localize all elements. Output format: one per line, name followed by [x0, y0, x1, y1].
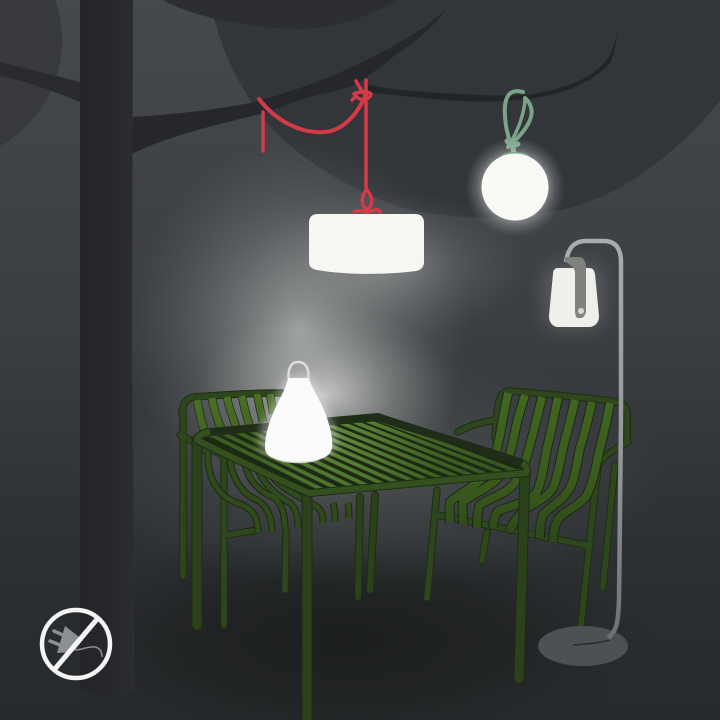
- left foliage: [0, 0, 62, 162]
- globe body: [482, 154, 548, 220]
- lamp: balad on stand: [546, 257, 602, 328]
- chair back slats: [197, 394, 273, 432]
- large foliage: [210, 0, 720, 217]
- red cord: [259, 80, 380, 212]
- table: [197, 417, 527, 720]
- ambient glow behind lamps: [70, 140, 670, 590]
- left branch: [0, 62, 80, 102]
- bell handle: [288, 362, 309, 378]
- globe cap: [501, 152, 529, 160]
- table top dark base: [197, 417, 527, 493]
- chair legs and frame: [427, 391, 628, 625]
- lamp: bell on table: [258, 362, 338, 463]
- floor lamp pole: [566, 241, 621, 638]
- chair seat slats: [208, 453, 349, 533]
- plug prongs: [50, 631, 65, 645]
- second branch: [368, 33, 617, 102]
- table top slats: [209, 419, 516, 490]
- drum body: [309, 214, 424, 274]
- table legs: [197, 440, 525, 720]
- chair slats: [450, 393, 610, 542]
- green strap: [505, 91, 532, 154]
- table frame: [197, 417, 527, 493]
- tree trunk: [80, 0, 135, 695]
- lamp strap: [565, 257, 586, 318]
- bell base: [273, 458, 323, 463]
- bell body: [265, 378, 332, 462]
- left chair: [180, 393, 349, 625]
- strap snap: [578, 308, 584, 314]
- prohibited slash: [54, 618, 98, 670]
- prohibited ring: [42, 610, 110, 678]
- chair legs and frame: [180, 393, 286, 625]
- bell glow: [258, 376, 338, 459]
- lamp body: [549, 268, 599, 327]
- lamp: hanging drum: [259, 80, 424, 274]
- globe glow: [465, 137, 565, 237]
- ground shadow: [25, 525, 665, 720]
- plug cord: [75, 647, 102, 657]
- floor lamp base: [538, 626, 628, 666]
- right branch: [130, 8, 447, 155]
- right chair: [427, 391, 628, 625]
- icon: no plug: [42, 610, 110, 678]
- plug body: [57, 626, 83, 653]
- lamp glow: [546, 266, 602, 328]
- lamp: globe: [465, 91, 565, 237]
- upper foliage: [163, 0, 397, 29]
